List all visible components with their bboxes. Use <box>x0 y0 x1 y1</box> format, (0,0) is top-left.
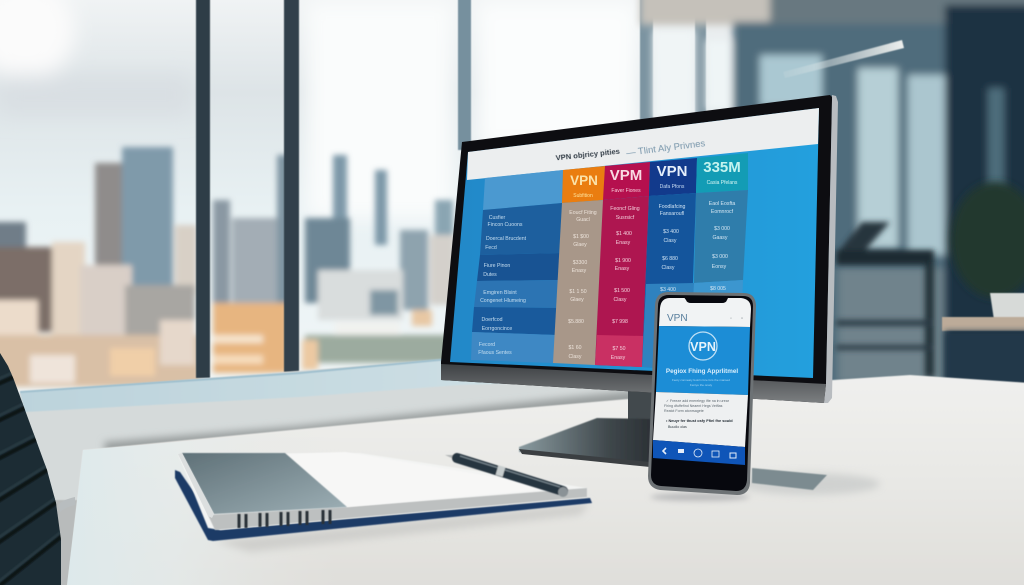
notebook shadow <box>215 503 590 552</box>
ceiling light strip <box>783 40 904 78</box>
background: window mullions <box>196 0 706 378</box>
plan column: orange tan: $1 60 <box>569 345 582 351</box>
title text: VPN objricy pities <box>555 147 620 162</box>
plan column: teal: $8 005 <box>710 286 726 292</box>
notebook <box>175 452 592 552</box>
background: office interior right <box>640 0 1024 402</box>
table left column: Congenet Hlumeing <box>480 298 526 304</box>
phone: ▫ <box>741 316 743 322</box>
background: cloud haze <box>0 0 640 220</box>
table left column: Doercal Brucdent <box>486 236 527 242</box>
phone hero heading: Pegiox Fhing Apprlitmel <box>666 368 738 375</box>
chair armrest <box>58 497 75 512</box>
plan column: crimson: $7 50 <box>613 346 626 352</box>
plan column: teal <box>690 153 748 368</box>
plan column: crimson: $1 400 <box>616 231 632 237</box>
phone hero subtext <box>672 378 730 387</box>
pen <box>445 455 568 497</box>
plan column: orange tan: Glaey <box>570 297 584 303</box>
phone: ◦ <box>730 316 732 322</box>
table left column: Dutes <box>483 272 497 278</box>
monitor <box>441 95 838 403</box>
phone: Fhing dfuffefind Neaent Hegs Vetflas <box>664 404 723 408</box>
plan column: crimson: Enasy <box>616 240 631 246</box>
plan column: teal: $3 000 <box>712 254 728 260</box>
plan column: crimson: VPM <box>610 167 642 184</box>
phone: VPN <box>667 313 688 324</box>
phone bottom nav <box>653 440 745 465</box>
plan column: crimson: Enasy <box>615 266 630 272</box>
phone body <box>648 292 756 495</box>
plan column: orange tan: $5.880 <box>568 319 584 325</box>
plan column: navy: Clasy <box>662 265 675 271</box>
table left column: Fecord <box>479 342 495 348</box>
phone white content <box>653 392 748 447</box>
plan column: crimson <box>595 162 650 367</box>
plan column: orange tan: Enasy <box>572 268 587 274</box>
phone hero subtext: Feniye the onaty <box>690 383 713 387</box>
plan column: navy <box>642 158 697 368</box>
notebook open page <box>285 452 560 507</box>
background: blurred city skyline <box>0 147 455 387</box>
plan column: teal: Eaol Eosfta <box>709 201 735 207</box>
VPN logo: VPN <box>690 340 716 354</box>
plan column: crimson: $1 500 <box>614 288 630 294</box>
plan column: orange tan: VPN <box>570 173 598 188</box>
phone: Buudlo olas <box>668 425 687 429</box>
plan column: crimson: $7 998 <box>612 319 628 325</box>
desk <box>67 375 1024 585</box>
plan column: orange tan: Clasy <box>569 354 582 360</box>
plan column: navy: $6 880 <box>662 256 678 262</box>
plan column: navy: Clasy <box>664 238 677 244</box>
wall below the window <box>0 355 660 585</box>
screen header bar <box>467 108 819 180</box>
plan column: teal: 335M <box>703 159 741 176</box>
plan column: navy: VPN <box>657 163 687 180</box>
monitor silver edge <box>824 95 838 403</box>
plan column: teal: $3 000 <box>714 226 730 232</box>
plan column: teal: Gaasy <box>712 235 728 241</box>
notebook pages <box>178 453 587 530</box>
table left column: Doerfcod <box>481 317 503 323</box>
plan column: orange tan: Guacl <box>576 217 590 223</box>
desk left highlight <box>67 428 340 585</box>
plan column: orange tan: $1 1 50 <box>569 289 587 295</box>
background: window sky <box>0 0 1024 420</box>
plan column: orange tan: Eoucf Fiting <box>569 210 597 216</box>
monitor body <box>441 95 832 403</box>
window sill <box>20 356 640 412</box>
floor behind chair <box>50 500 80 585</box>
plan column: orange tan: Glaey <box>573 242 587 248</box>
monitor chin <box>441 364 826 403</box>
spiral binding <box>239 510 330 528</box>
phone notch <box>683 296 729 303</box>
table left column: Fincon Cuoons <box>488 222 523 228</box>
plan column: orange tan: Subfition <box>573 193 593 199</box>
plan column: crimson: Susrsicf <box>616 215 635 221</box>
plan column: navy: $3 400 <box>660 287 676 293</box>
plan column: orange tan: $3300 <box>573 260 587 266</box>
table left column: Cusfier <box>489 215 505 221</box>
table left column <box>471 170 563 363</box>
plan column: teal: Eonsy <box>712 264 727 270</box>
phone: Reatct Form atonrsagete <box>664 409 704 413</box>
office chair <box>0 350 65 585</box>
plan column: crimson: Feoncf Gling <box>610 206 640 212</box>
plant and pot <box>942 182 1024 386</box>
VPN logo <box>689 332 717 360</box>
table left column: Eorrgoncince <box>482 326 512 332</box>
table left column: Emgiren Blsint <box>483 290 517 296</box>
phone blue hero <box>656 326 750 395</box>
plan column: crimson: $1 900 <box>615 258 631 264</box>
monitor stand <box>519 390 880 495</box>
notebook back cover <box>175 470 592 541</box>
phone: • Neuyr fer thust osfy Ffiel fhe sould <box>666 418 733 423</box>
plan column: orange tan <box>553 166 605 365</box>
screen background <box>450 108 819 378</box>
plan column: crimson: Clasy <box>614 297 627 303</box>
plan column: navy: Dafa Pfons <box>660 184 685 190</box>
table left column: Fiure Pinon <box>484 263 510 269</box>
plan column: navy: Foodlafcing <box>659 204 686 210</box>
table left column: Fecd <box>485 245 497 251</box>
phone: ✓ Freeze add enerelegy ifte na in urear <box>666 399 730 403</box>
plan column: teal: Eomnrocf <box>711 209 734 215</box>
plan column: teal: Casia Pfelans <box>707 180 738 186</box>
plan column: crimson: Enasy <box>611 355 626 361</box>
phone screen top bar <box>659 298 751 327</box>
shadow band behind the desk <box>105 400 640 452</box>
title text <box>555 138 706 162</box>
plan column: navy: Fansaroufl <box>660 211 684 217</box>
plan column: orange tan: $1 $00 <box>573 234 589 240</box>
plan column: crimson: Faver Fiones <box>611 188 641 194</box>
plan column: navy: $3 400 <box>663 229 679 235</box>
notebook cover <box>182 453 347 514</box>
phone hero subtext: Feoty conneaty feotrin fore fors the mansed <box>672 378 730 382</box>
table left column: Ffaous Sentes <box>478 350 512 356</box>
title text: — Tlint Aly Privnes <box>626 138 706 159</box>
phone <box>648 292 756 501</box>
background desk and laptop <box>836 222 934 377</box>
